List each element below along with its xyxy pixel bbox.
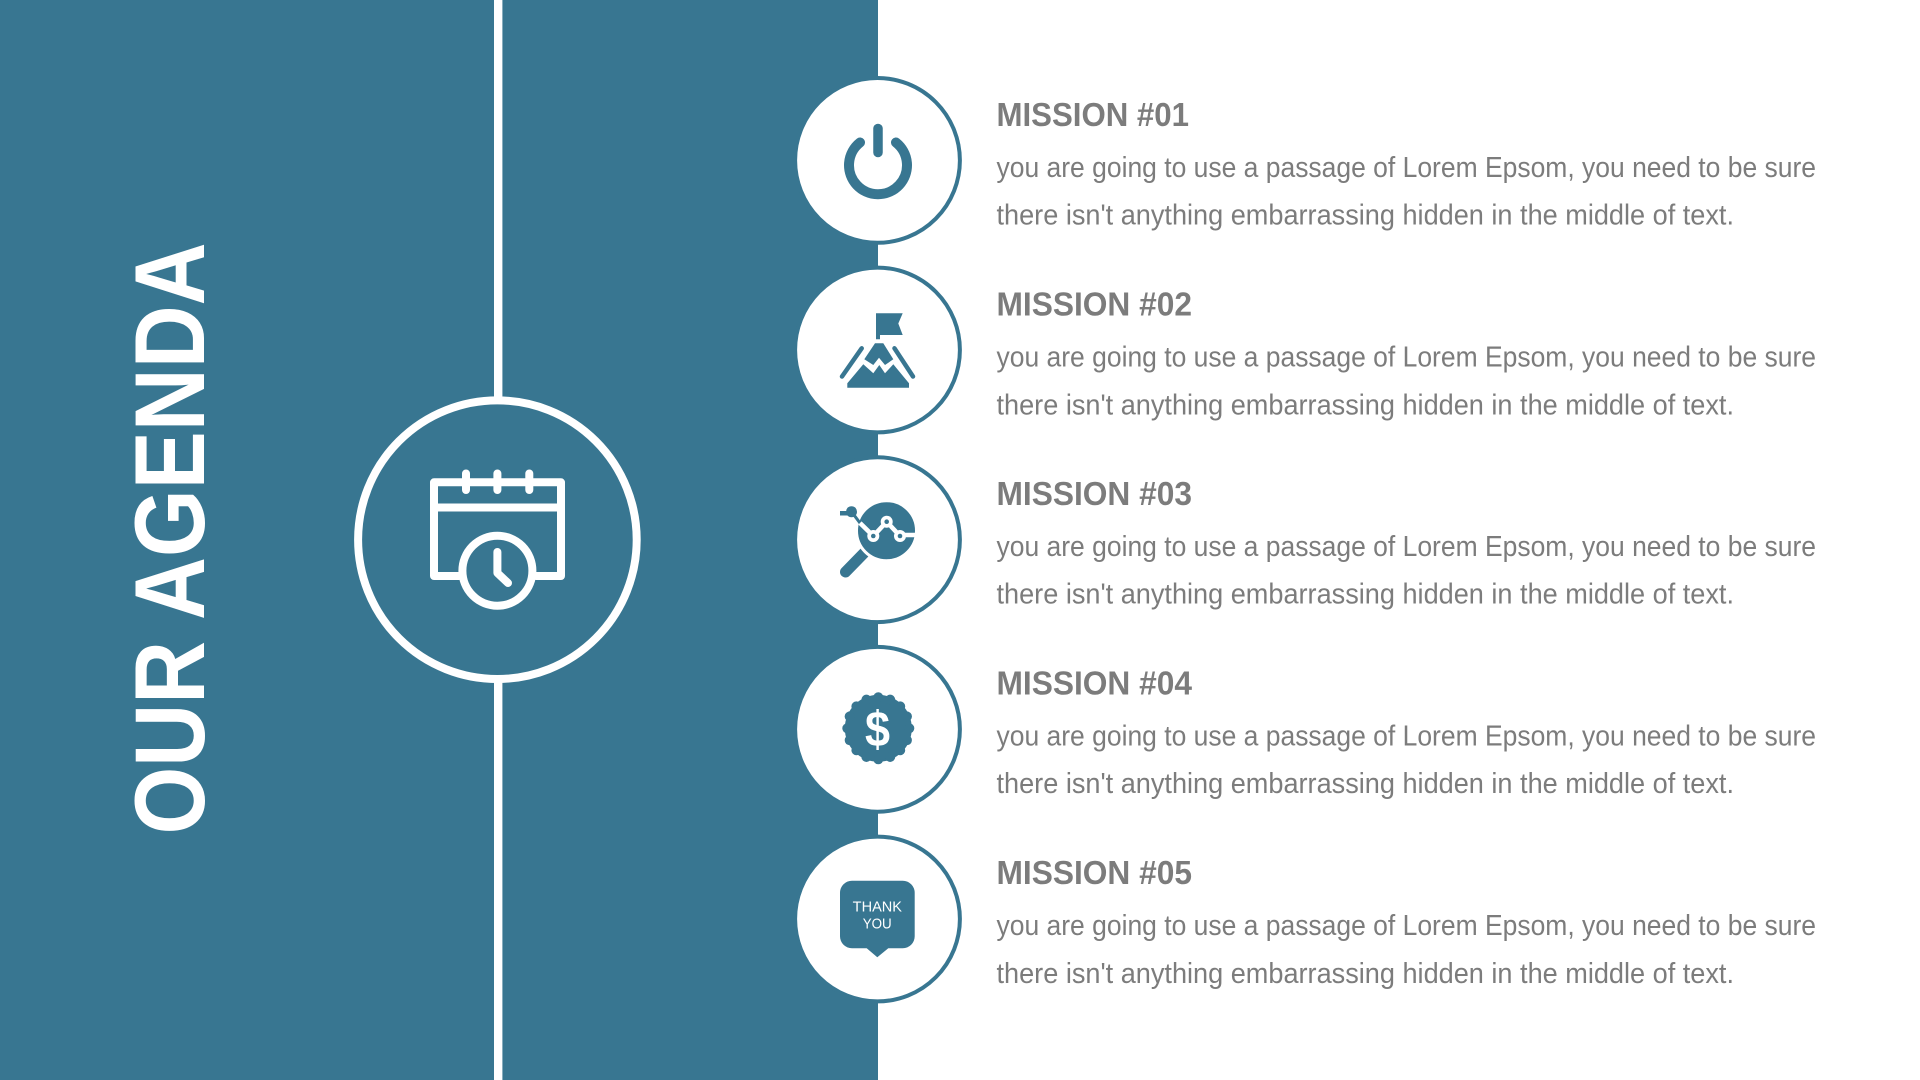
body text: mission 02: there isn't anything embarrassing hidden in the middle of text. xyxy=(996,390,1734,422)
mission 5 xyxy=(795,837,1816,1001)
icon: dollar badge xyxy=(795,647,960,812)
body text: mission 03: you are going to use a passage of Lorem Epsom, you need to be sure xyxy=(996,531,1816,563)
body text: mission 01: there isn't anything embarrassing hidden in the middle of text. xyxy=(996,200,1734,232)
body text: mission 04: there isn't anything embarrassing hidden in the middle of text. xyxy=(996,768,1734,800)
heading: mission 04: MISSION #04 xyxy=(996,664,1193,702)
mission 1 xyxy=(795,78,1816,243)
icon: thank you speech bubble: THANK xyxy=(853,900,902,916)
panel: teal left background xyxy=(0,0,878,1080)
body text: mission 04: you are going to use a passage of Lorem Epsom, you need to be sure xyxy=(996,720,1816,752)
icon: power button xyxy=(795,78,960,243)
icon: magnifier with line chart xyxy=(795,457,960,622)
heading: mission 01: MISSION #01 xyxy=(996,96,1189,133)
icon: calendar with clock in central circle xyxy=(358,400,637,679)
mission 4 xyxy=(795,647,1816,812)
body text: mission 04 xyxy=(996,720,1816,800)
body text: mission 02 xyxy=(996,342,1816,422)
body text: mission 01 xyxy=(996,152,1816,232)
body text: mission 01: you are going to use a passage of Lorem Epsom, you need to be sure xyxy=(996,152,1816,184)
body text: mission 05: there isn't anything embarrassing hidden in the middle of text. xyxy=(996,958,1734,990)
icon: thank you speech bubble: YOU xyxy=(863,916,892,932)
icon: dollar badge: $ xyxy=(865,702,890,758)
body text: mission 05 xyxy=(996,910,1816,990)
vertical white line xyxy=(494,0,502,1080)
icon: thank you speech bubble xyxy=(795,837,960,1001)
icon: mountain with flag xyxy=(795,268,960,432)
mission 2 xyxy=(795,268,1816,432)
body text: mission 02: you are going to use a passage of Lorem Epsom, you need to be sure xyxy=(996,342,1816,374)
title: OUR AGENDA xyxy=(114,242,225,834)
mission 3 xyxy=(795,457,1816,622)
body text: mission 05: you are going to use a passage of Lorem Epsom, you need to be sure xyxy=(996,910,1816,942)
body text: mission 03 xyxy=(996,531,1816,610)
heading: mission 05: MISSION #05 xyxy=(996,854,1192,891)
heading: mission 02: MISSION #02 xyxy=(996,286,1192,322)
body text: mission 03: there isn't anything embarrassing hidden in the middle of text. xyxy=(996,578,1734,610)
heading: mission 03: MISSION #03 xyxy=(996,475,1192,512)
